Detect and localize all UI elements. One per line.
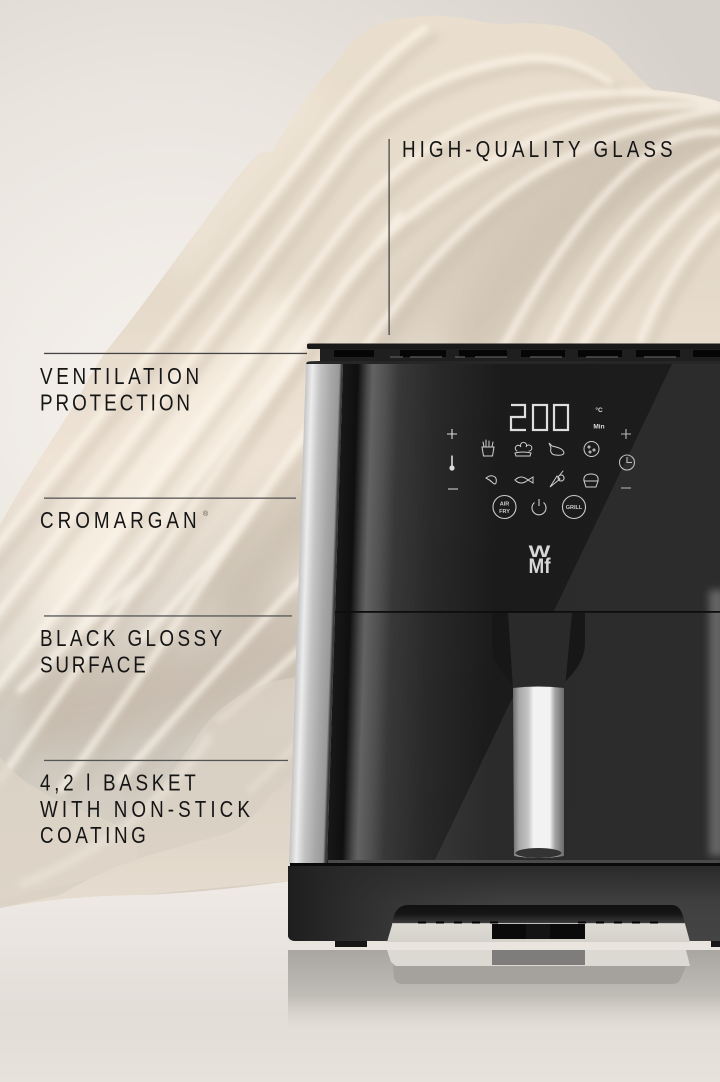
base [288, 863, 720, 941]
grill button [562, 496, 586, 518]
lid top lip [307, 344, 720, 349]
callout: black glossy surface: SURFACE [40, 653, 146, 678]
unit labels [593, 406, 605, 430]
WMF logo [528, 543, 551, 578]
base opening [387, 905, 690, 942]
unit labels: Min [593, 424, 605, 430]
callout: basket: 4,2 l BASKET [40, 771, 196, 796]
panel divider [335, 611, 720, 613]
stainless side band [289, 364, 343, 864]
handle mount [492, 613, 585, 688]
air fry button: FRY [499, 509, 510, 515]
air fryer [288, 344, 720, 947]
callout: basket: WITH NON-STICK [40, 797, 250, 822]
WMF logo: Mf [528, 555, 551, 578]
callout: ventilation protection: PROTECTION [40, 391, 190, 416]
callout: black glossy surface: BLACK GLOSSY [40, 626, 222, 651]
steel handle [513, 686, 564, 858]
lower fold left [0, 758, 114, 850]
unit labels: °C [595, 406, 603, 414]
callout: ventilation protection [40, 353, 307, 416]
callout: ventilation protection: VENTILATION [40, 364, 199, 389]
temperature display [511, 405, 568, 430]
callout: black glossy surface [40, 615, 292, 678]
front glass body [327, 364, 720, 864]
time controls [620, 429, 634, 488]
air fry button: AIR [500, 502, 509, 508]
grill button: GRILL [566, 505, 583, 511]
control panel [447, 405, 634, 578]
feet [335, 941, 720, 947]
reflection on floor [288, 950, 720, 1028]
ventilation slots [306, 349, 720, 364]
temperature controls [447, 429, 458, 489]
callout: cromargan: ® [203, 510, 209, 518]
floor surface [0, 880, 720, 1082]
air fry button [493, 496, 516, 518]
lower fold right lower [14, 862, 290, 906]
callout: cromargan [40, 498, 296, 533]
callout: basket [40, 760, 288, 848]
right edge reflection [709, 590, 720, 856]
callout: basket: COATING [40, 823, 146, 848]
glass diagonal reflection [433, 364, 720, 864]
power button [532, 499, 546, 515]
callout: high-quality glass: HIGH-QUALITY GLASS [402, 137, 673, 162]
program icons [482, 440, 599, 487]
callout: cromargan: CROMARGAN [40, 508, 197, 533]
lower fold right upper [167, 678, 295, 807]
WMF logo: W [529, 543, 551, 561]
